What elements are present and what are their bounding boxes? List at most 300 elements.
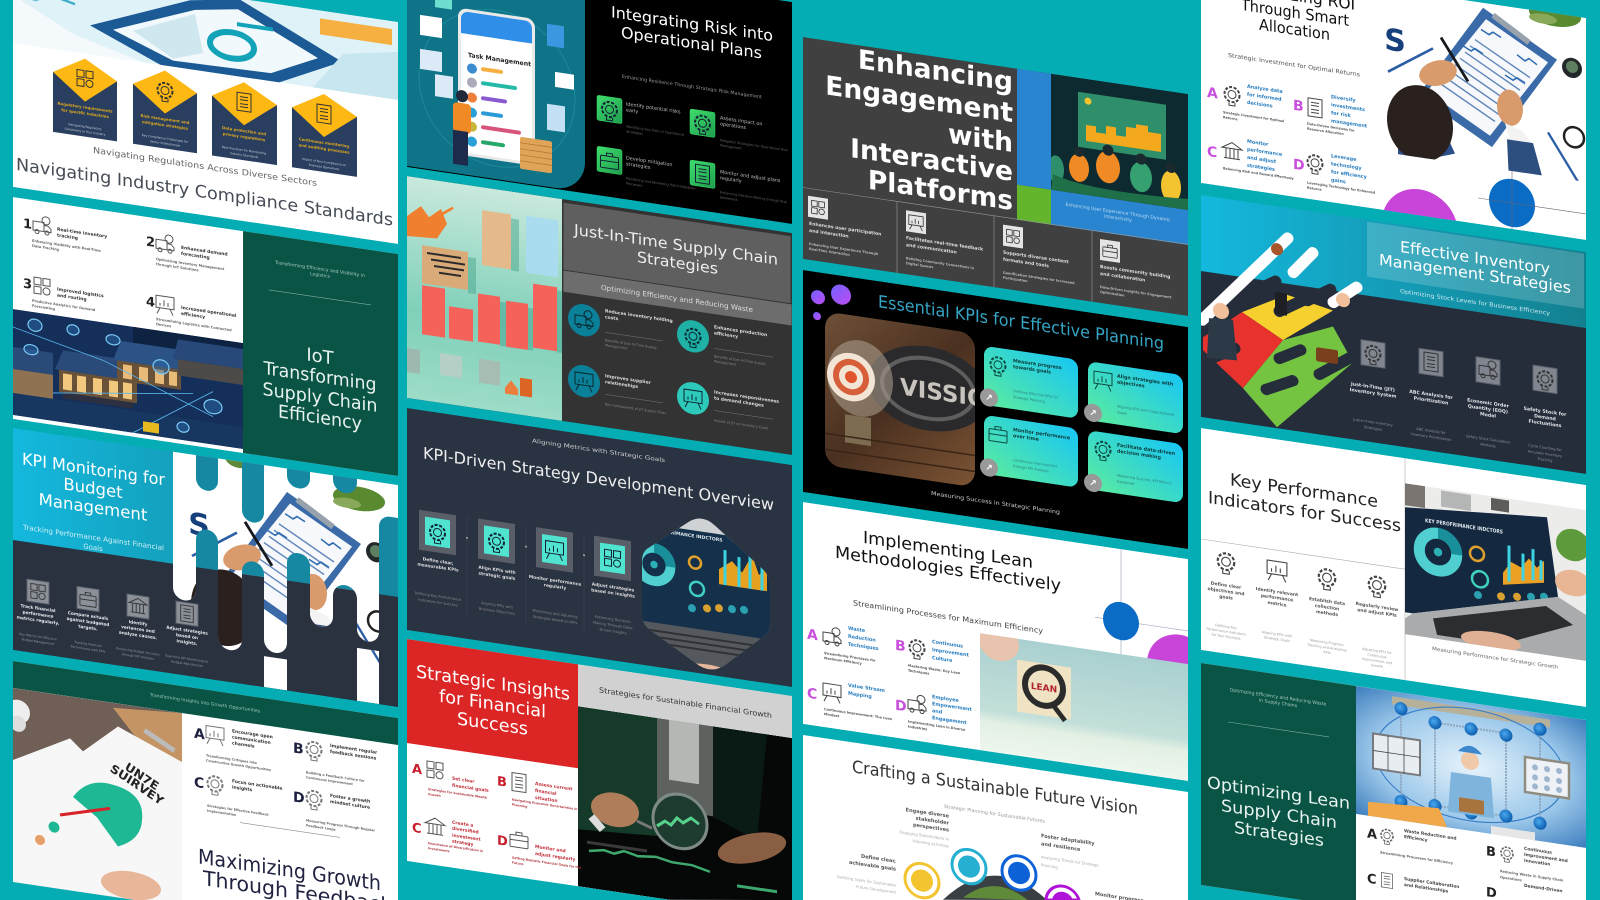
step 3: Monitoring and Adjusting	[532, 609, 578, 619]
item 3: Safety Stock Calculation	[1466, 434, 1510, 445]
green panel: Logistics	[310, 271, 331, 280]
item C: performance	[1247, 147, 1283, 158]
item B	[497, 770, 577, 816]
item: engage: perspectives	[913, 822, 949, 834]
item 3: Economic Order	[1467, 397, 1510, 410]
item D: Engagement	[932, 715, 967, 726]
card 2	[1084, 361, 1183, 435]
item 2: Aligning KPIs with	[1262, 630, 1292, 638]
item B: Diversify	[1331, 94, 1356, 104]
photo: LEAN cube	[979, 622, 1188, 781]
item 4: based on	[176, 632, 198, 641]
cell 4: and collaboration	[1100, 271, 1145, 284]
card 3: through KPI Analysis	[1013, 464, 1049, 473]
item B: Improvement	[932, 647, 969, 659]
panel title: Transforming	[263, 358, 376, 396]
card 1	[53, 54, 117, 141]
item 2: ABC Analysis for	[1416, 427, 1446, 435]
illustration: task management phone	[407, 0, 585, 188]
card 3: privacy regulations	[223, 131, 266, 142]
item 4: 4	[146, 295, 155, 311]
item: foster	[1041, 833, 1099, 876]
step 3: regularly	[544, 582, 566, 592]
item 1: objectives and	[1208, 586, 1244, 597]
cell 1: and interaction	[809, 228, 849, 240]
card 1: towards goals	[1013, 364, 1051, 376]
photo: hexagon laptop dashboard: KEOFRIMANCE INDCTORS	[657, 528, 723, 544]
title	[825, 39, 1013, 217]
item 4: Growth	[1371, 663, 1383, 669]
item 2	[677, 318, 773, 372]
item: engage	[899, 806, 950, 849]
header panel: Optimizing Efficiency and Reducing Waste	[601, 283, 753, 314]
item 3: Monitoring and Reviewing Risk Integration	[626, 176, 696, 191]
item: foster: Foster adaptability	[1041, 833, 1095, 847]
title	[1235, 0, 1355, 48]
red title panel: Strategic Insights	[416, 662, 570, 705]
card 4: Explained	[1117, 479, 1134, 486]
photo: audience and chart	[1048, 73, 1188, 210]
step 1: Indicators for Success	[418, 598, 458, 608]
item C: Value Stream	[848, 683, 885, 694]
item 3	[1306, 566, 1347, 658]
title: Maximizing Growth	[198, 844, 381, 895]
caption: Enhancing User Experience Through Dynamic	[1065, 202, 1171, 223]
item 1: goals	[1219, 594, 1233, 602]
item C: C	[412, 821, 422, 837]
item D: technology	[1331, 161, 1362, 172]
cell 4: Data-Driven Insights for Engagement	[1100, 285, 1172, 300]
item 3: relationships	[605, 379, 638, 390]
card 4: ↗	[1089, 478, 1097, 489]
title	[1208, 467, 1401, 537]
item B: for risk	[1331, 110, 1352, 119]
green panel: Optimizing Efficiency and Reducing Waste	[1230, 687, 1326, 708]
item 4: Increases responsiveness	[714, 389, 779, 405]
item 4: Budget Adjustments	[171, 659, 203, 668]
card 3: Best Practices for Maintaining	[222, 145, 266, 155]
card 2: mitigation strategies	[142, 119, 189, 131]
item B: B	[1486, 844, 1496, 861]
item B: Culture	[932, 655, 953, 664]
illustration: task management phone: Task Management	[468, 52, 531, 68]
item C: Balancing Risk and Reward Effectively	[1223, 166, 1295, 181]
item 2: operations	[720, 121, 746, 131]
item A: Returns	[1223, 115, 1238, 121]
card 3: Data protection and	[222, 125, 266, 136]
red title panel: for Financial	[439, 687, 546, 723]
title: Integrating Risk into	[611, 3, 773, 45]
caption: Measuring Performance for Strategic Growth	[1432, 646, 1558, 671]
card 4: Business Operations	[309, 163, 340, 171]
item 2: performance	[1261, 593, 1293, 604]
photo: magnifier over charts	[578, 706, 792, 900]
subtitle: Strategic Investment for Optimal Returns	[1228, 53, 1360, 79]
item B: Implement regular	[330, 743, 378, 756]
item D: Demand-Driven	[1524, 883, 1562, 894]
item A: communication	[232, 734, 271, 746]
item 3: collection	[1315, 603, 1339, 612]
item 4: Safety Stock for	[1524, 406, 1567, 418]
grey band: Strategies for Sustainable Financial Growth	[599, 685, 772, 720]
item A: Transforming Critiques into	[206, 754, 257, 765]
item A: Set clear	[452, 776, 475, 785]
item 2: Assess impact on	[720, 115, 762, 128]
item 2: forecasting	[181, 251, 210, 261]
ring icons	[905, 839, 1079, 900]
item B: Innovation	[1524, 858, 1550, 868]
item 3: Model	[1480, 411, 1496, 420]
item 3: strategies	[626, 161, 651, 171]
item B: Improvement and	[1524, 852, 1568, 864]
item 1: Strategies	[1364, 425, 1382, 432]
item 3: Establish data	[1309, 596, 1345, 607]
item B: Assess current	[535, 781, 573, 793]
card 1: Regulatory requirements	[57, 101, 113, 114]
title: Navigating Industry Compliance Standards	[16, 155, 393, 231]
step 1	[415, 509, 468, 609]
item: define: achievable goals	[849, 860, 896, 873]
item 2: against budgeted	[67, 616, 109, 628]
item: foster: Analyzing Trends for Strategic	[1041, 854, 1099, 868]
card 1: Complexity in Your Industry	[64, 127, 106, 137]
item 3: Key Components of JIT Supply Chain	[605, 402, 667, 415]
item 1	[1350, 338, 1396, 434]
item 1: costs	[605, 314, 619, 322]
card 4: and auditing processes	[299, 142, 350, 155]
item 3: Methods	[1480, 442, 1496, 449]
item D	[895, 689, 972, 738]
grey band	[578, 664, 792, 738]
item 1: early	[626, 107, 638, 115]
item 4: Accurate Inventory	[1528, 449, 1563, 459]
item A: A	[194, 726, 205, 743]
photo: survey on desk	[6, 687, 182, 900]
item C: Implementation	[207, 809, 237, 817]
item 3: Enhancing Budget Accuracy	[116, 646, 160, 657]
cell 1: Enhancing User Experience Through	[809, 242, 879, 256]
slide: Essential KPIs for Effective Planning	[803, 270, 1188, 549]
title: Essential KPIs for Effective Planning	[878, 292, 1164, 354]
item B: Data-Driven Decisions for	[1307, 122, 1355, 133]
title	[835, 524, 1061, 596]
title: Methodologies Effectively	[835, 543, 1061, 596]
item 2: Prioritization	[1414, 395, 1448, 407]
item 1	[596, 95, 684, 136]
photo: target bulb and vision sign: VISSIO	[900, 374, 987, 413]
item: define: Future Development	[856, 884, 896, 895]
card 3: ↗	[985, 463, 993, 474]
item 3: Forecasting	[32, 304, 56, 311]
item 3: Tracking and Analyzing	[1306, 643, 1347, 653]
subtitle: Enhancing Resilience Through Strategic Risk Management	[622, 74, 762, 101]
item D: Empowerment	[932, 701, 972, 713]
item 3: Identify	[129, 619, 148, 628]
title: Implementing Lean	[863, 528, 1033, 573]
step 4: Enhancing Decision-	[595, 615, 632, 624]
item 2: Benefits of Just-In-Time Supply	[714, 354, 766, 366]
slide: Effective Inventory Management Strategies	[1201, 195, 1586, 474]
item D	[1293, 148, 1376, 200]
card 3: Continuous Improvement	[1013, 458, 1058, 469]
item C: and adjust	[1247, 155, 1277, 165]
item B: Reducing Waste in Supply Chain	[1500, 869, 1564, 883]
subtitle: Navigating Regulations Across Diverse Sectors	[93, 146, 318, 189]
step 4: based on insights	[591, 587, 635, 600]
item C: C	[1207, 144, 1217, 161]
item A: A	[1207, 85, 1218, 102]
slide: Integrating Risk into Operational Plans	[377, 0, 792, 224]
item D: gains	[1331, 177, 1346, 185]
card 4: Impact of Non-Compliance on	[302, 157, 346, 167]
item C	[194, 775, 282, 816]
item D: Leverage	[1331, 153, 1357, 163]
item B: B	[895, 638, 906, 655]
item D: D	[497, 833, 508, 850]
item A: Efficiency	[1404, 834, 1428, 844]
title: Platforms	[868, 165, 1013, 217]
item C: Continuous Improvement: The Lean	[824, 707, 893, 721]
item B: B	[497, 774, 507, 791]
slide: KPI Monitoring for Budget Management	[13, 428, 398, 707]
cell 3: Gamification Strategies for Increased	[1003, 271, 1075, 285]
item D: Setting Realistic Financial Goals for the	[512, 856, 581, 870]
item C: investment	[452, 833, 481, 843]
illustration: puzzle team	[1202, 225, 1357, 439]
card 2: Risk management and	[141, 113, 190, 125]
item 1: Identify potential risks	[626, 101, 681, 116]
item B: Resource Allocation	[1307, 127, 1344, 136]
item 4	[1524, 364, 1567, 465]
cell 2: Digital Spaces	[906, 261, 933, 269]
photo: hexagon laptop dashboard	[638, 504, 770, 686]
item 1: Define clear	[1211, 580, 1242, 591]
panel title: Supply Chain	[1221, 796, 1337, 832]
item B: Continuous	[1524, 846, 1552, 856]
title panel: Effective Inventory	[1400, 238, 1550, 278]
item 1: Management	[605, 343, 628, 351]
cell 2: and communication	[906, 242, 957, 256]
item A: A	[1367, 827, 1378, 843]
title	[573, 221, 778, 287]
item D: Leveraging Technology for Enhanced	[1307, 181, 1376, 195]
decoration: circles	[1382, 152, 1586, 290]
item D: D	[1293, 157, 1305, 174]
cell 4: Optimization	[1100, 290, 1125, 298]
item B: financial	[535, 788, 557, 797]
item 4: Enhancing Decision-Making through Risk	[720, 190, 787, 204]
slide: Key Performance Indicators for Success	[1201, 428, 1591, 708]
item C: and Relationships	[1404, 882, 1449, 895]
item C: C	[807, 686, 817, 703]
item 4: Impact of JIT on Inventory Costs	[714, 418, 768, 430]
item 1: Reduces inventory holding	[605, 308, 673, 324]
item: define: Define clear,	[861, 854, 896, 865]
item 3	[596, 146, 696, 190]
card 2: ↗	[1089, 408, 1097, 419]
title: Strategies	[637, 248, 718, 278]
photo strips: clipboard	[173, 432, 398, 707]
item D: Monitor and	[535, 844, 566, 854]
title panel	[1367, 222, 1584, 309]
step 4: Making Through Data-	[593, 621, 634, 631]
item 3: methods	[1316, 609, 1338, 618]
item A: financial goals	[452, 783, 489, 794]
item 1	[1206, 551, 1246, 642]
card 3: over time	[1013, 433, 1040, 443]
item D	[1486, 877, 1562, 900]
item 3: Quantity (EOQ)	[1468, 404, 1508, 415]
header band: Transforming Insights into Growth Opportunities	[149, 692, 261, 715]
item C: C	[1367, 872, 1377, 888]
item B	[294, 741, 378, 786]
caption: Interactivity	[1104, 214, 1132, 224]
item B: Planning	[512, 803, 527, 809]
step 3: Monitor performance	[529, 574, 581, 588]
panel title: Strategies	[1234, 818, 1324, 850]
item A: Strategies for Sustainable Wealth	[428, 787, 487, 800]
cell 3: Supports diverse content	[1003, 250, 1069, 265]
item B: investments	[1331, 102, 1365, 113]
card 4: decision making	[1117, 448, 1161, 461]
item D	[294, 790, 375, 832]
item C	[807, 677, 893, 726]
item 4	[1356, 574, 1399, 671]
item 4: insights.	[177, 638, 198, 647]
item 4: regularly	[720, 175, 742, 185]
item D: adjust regularly	[535, 851, 575, 863]
item 3: KPIs	[1323, 650, 1331, 655]
item 2	[690, 108, 788, 152]
item 2: Identify relevant	[1256, 586, 1299, 598]
item A: Encourage open	[232, 728, 273, 740]
item 4: to demand changes	[714, 395, 764, 409]
title	[24, 452, 165, 521]
cell 1: Enhances user participation	[809, 221, 881, 238]
item: engage: Engaging Stakeholders in	[899, 829, 950, 842]
subtitle: Optimizing Stock Levels for Business Efficiency	[1400, 289, 1551, 317]
item B: feedback sessions	[330, 749, 377, 762]
item: engage: stakeholder	[916, 816, 950, 827]
item A	[1367, 823, 1457, 866]
red title panel: Success	[457, 709, 528, 740]
card 3: Industry Standards	[230, 151, 259, 159]
title: Crafting a Sustainable Future Vision	[852, 757, 1138, 820]
step 2	[478, 519, 527, 618]
step 1: measurable KPIs	[417, 562, 459, 574]
item A	[1207, 78, 1284, 128]
cell 3	[1003, 225, 1075, 290]
card 1: ↗	[985, 393, 993, 404]
item A: Strategic Investment for Optimal	[1223, 110, 1284, 123]
card 4	[1084, 430, 1183, 505]
item 4: Devices	[156, 322, 171, 328]
photo: signing document	[1384, 0, 1584, 193]
item 3: Improves supplier	[605, 373, 651, 386]
item B: Techniques	[908, 669, 929, 676]
illustration: compliance tablet	[13, 0, 398, 101]
item B: management	[1331, 118, 1368, 130]
item 1: Just-In-Time (JIT)	[1350, 381, 1395, 394]
item 1	[17, 578, 60, 647]
card 1: Measure progress	[1013, 358, 1062, 371]
card 2: Key Compliance Challenges for	[142, 133, 189, 144]
item 3: Improved logistics	[57, 287, 104, 299]
card 3	[212, 77, 277, 165]
item C: Mindset	[824, 712, 840, 718]
cell 3: Participation	[1003, 276, 1028, 283]
item C	[1367, 870, 1459, 900]
green panel: Transforming Efficiency and Visibility in	[274, 260, 365, 279]
photo: survey on desk: SUIRVEY	[108, 762, 166, 808]
item 3: through KPI Analysis	[122, 652, 154, 661]
cell 4	[1100, 239, 1172, 305]
item 2: Management	[714, 359, 737, 367]
item C: Focus on actionable	[232, 778, 282, 792]
item B: situation	[535, 795, 558, 804]
item 4: Tracking	[1537, 457, 1552, 463]
item 1: Identifying Key Risks in Operational	[626, 124, 684, 137]
step 2: Aligning KPIs with	[481, 601, 513, 610]
item D: mindset culture	[330, 799, 370, 811]
item 2	[147, 234, 228, 272]
item D: and	[932, 708, 943, 716]
slide: Crafting a Sustainable Future Vision	[803, 735, 1188, 900]
item 3: Predictive Analytics for Demand	[32, 299, 96, 312]
item B: Continuous	[932, 639, 963, 650]
item C: Strategies for Effective Feedback	[207, 804, 269, 817]
panel title: Optimizing Lean	[1207, 773, 1350, 813]
title: with	[948, 119, 1013, 159]
item 2: through IoT Solutions	[156, 262, 199, 272]
item A: A	[807, 627, 818, 644]
item 3: and routing	[57, 293, 87, 303]
item 4: Monitor and adjust plans	[720, 169, 781, 184]
card 1: Strategic Planning	[1013, 395, 1045, 404]
item B	[1293, 89, 1368, 140]
item 4: Demand	[1534, 413, 1556, 423]
title: KPI-Driven Strategy Development Overview	[423, 443, 774, 514]
card 4: Facilitate data-driven	[1117, 442, 1176, 457]
item 2: Management	[720, 143, 742, 151]
item A: A	[412, 762, 423, 778]
item 3	[24, 276, 104, 312]
card 2: Align strategies with	[1117, 373, 1174, 388]
item: define	[837, 850, 897, 895]
item 4: Regularly review	[1356, 601, 1399, 613]
item C: Mapping	[848, 691, 872, 700]
item 2: Tracking Financial	[73, 640, 102, 648]
item 4: Cycle Counting for	[1528, 443, 1562, 452]
item D: for efficiency	[1331, 169, 1368, 181]
item 3	[1466, 355, 1510, 451]
item C: strategies	[1247, 163, 1275, 173]
item 2	[1409, 347, 1453, 442]
cell 2: Building Community Connections in	[906, 256, 975, 270]
title: Engagement	[825, 70, 1013, 129]
item 4: Fluctuations	[1529, 418, 1562, 429]
red title panel	[407, 639, 578, 768]
item 3: Develop mitigation	[626, 155, 672, 168]
slide: KPI-Driven Strategy Development Overview	[407, 408, 792, 689]
subtitle: Goals	[83, 541, 103, 553]
subtitle: Strategic Planning for Sustainable Futures	[944, 804, 1045, 825]
panel title	[1207, 773, 1350, 854]
item C: Supplier Collaboration	[1404, 876, 1459, 890]
item 1: 1	[23, 217, 32, 233]
item 1: Enhancing Visibility with Real-Time	[32, 239, 101, 253]
item 1: Performance Indicators	[1206, 627, 1246, 637]
